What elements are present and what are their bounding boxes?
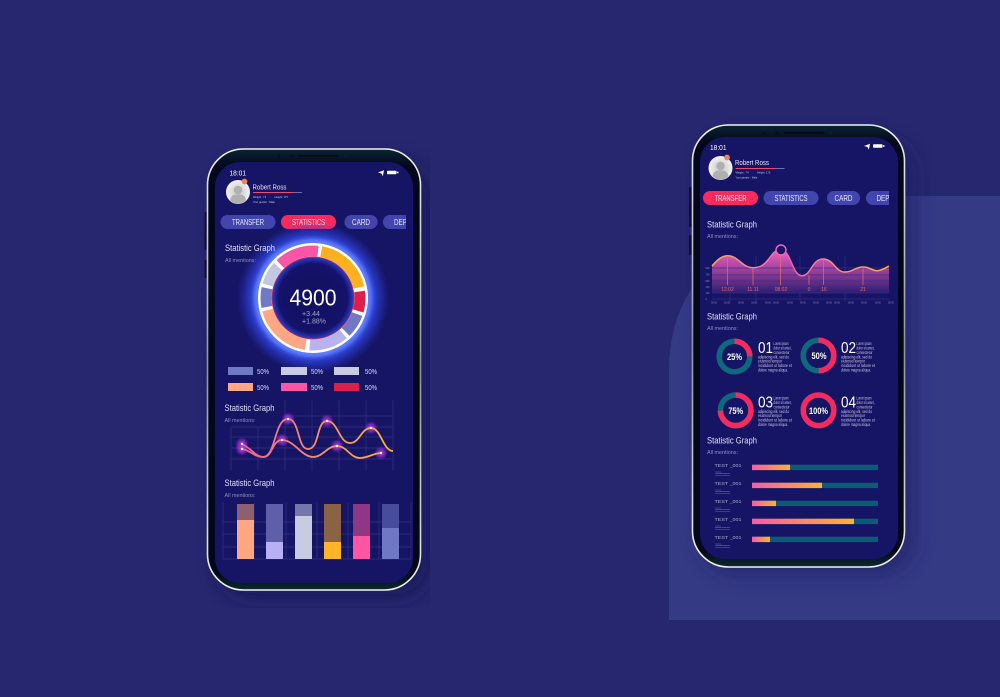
donut chart: 4900: +1.88% [302,316,326,326]
donut 75% with text 03: Lorem ipsum [774,396,789,400]
area chart right: 300 [706,286,710,289]
area chart right: 12.02 [721,287,734,293]
donut 50% with text 02: adipiscing elit, sed do [841,354,872,360]
donut 100% with text 04: 100% [809,406,828,417]
area chart right: 16 [821,287,827,293]
left phone drop shadow [217,160,432,600]
heading: statistic graph 3 right: Statistic Graph [707,436,757,446]
profile left: Your gender : Male [253,200,275,204]
progress bars right [714,463,878,548]
status bar left: 18:01 [230,168,246,178]
status bar right [710,143,884,152]
tabs right: TRANSFER [714,194,747,203]
area chart right: 00:00 [787,302,794,304]
donut 100% with text 04: adipiscing elit, sed do [841,409,872,414]
donut 50% with text 02: 50% [812,351,827,362]
donut 50% with text 02: 02 [841,340,856,357]
heading: statistic graph 3 left [224,478,274,499]
tabs right [703,191,906,205]
status bar left [230,168,398,178]
tabs right: STATISTICS [774,194,808,203]
area chart right: 00:00 [765,302,772,304]
status bar right: 18:01 [710,143,726,152]
heading: statistic graph 1 left: Statistic Graph [225,243,275,254]
heading: statistic graph 2 right: Statistic Graph [707,312,757,322]
donut 50% with text 02: incididunt ut labore et [841,363,876,368]
heading: statistic graph 2 left: All mentions: [224,418,256,424]
heading: statistic graph 1 left [225,243,275,264]
donut 25% with text 01: adipiscing elit, sed do [758,354,789,360]
area chart right: 21 [860,287,866,293]
donut 75% with text 03: dolor sit amet, [774,400,792,405]
donut 50% with text 02 [803,340,876,372]
heading: statistic graph 3 right: All mentions: [707,450,738,456]
area chart right: 00:00 [751,302,758,304]
legend: 50% [257,367,269,376]
area chart right: 08.02 [775,287,787,293]
heading: statistic graph 1 right: All mentions: [707,234,738,240]
area chart right: 00:00 [888,302,895,304]
donut 75% with text 03: 03 [758,394,773,412]
donut chart glow [237,222,389,374]
donut 75% with text 03: incididunt ut labore et [758,418,793,422]
area chart right [706,245,895,304]
donut 75% with text 03: consectetur [774,404,790,410]
area chart right: 00:00 [773,302,780,304]
legend: 50% [311,367,323,376]
heading: statistic graph 1 right: Statistic Graph [707,220,757,230]
donut 25% with text 01: Lorem ipsum [774,341,789,346]
progress bars right: TEST _001 [714,535,742,540]
donut 100% with text 04: eiusmod tempor [841,413,865,418]
heading: statistic graph 1 right [707,220,757,240]
donut 50% with text 02: dolore magna aliqua. [841,368,871,372]
area chart right: 900 [706,267,710,270]
donut 25% with text 01: 25% [727,352,742,363]
donut 100% with text 04: incididunt ut labore et [841,418,876,422]
donut chart: 4900 [247,232,379,364]
area chart right: 00:00 [826,302,833,304]
area chart right: 0 [808,287,811,293]
legend: 50% [257,383,269,392]
donut 75% with text 03: dolore magna aliqua. [758,422,788,427]
legend [228,367,377,392]
tabs left: DEP [394,218,407,227]
profile left: Weight : 74 [253,195,267,199]
heading: statistic graph 2 right [707,312,757,332]
donut 50% with text 02: dolor sit amet, [856,346,874,350]
area chart right: 100 [706,292,710,295]
donut 75% with text 03: eiusmod tempor [758,413,782,418]
donut 25% with text 01: dolor sit amet, [774,346,792,350]
donut 25% with text 01: 01 [758,340,773,357]
area chart right: 500 [706,280,710,283]
profile right [708,155,784,180]
line chart left [231,400,393,471]
donut 75% with text 03 [720,394,793,427]
background panel: lighter shape behind right phone [669,196,1000,620]
tabs left: CARD [352,218,370,227]
heading: statistic graph 3 left: Statistic Graph [224,478,274,489]
profile left [226,179,302,204]
donut 75% with text 03: adipiscing elit, sed do [758,409,789,414]
profile left: Robert Ross [252,182,287,192]
area chart right: 00:00 [861,302,868,304]
donut 50% with text 02: Lorem ipsum [856,341,872,346]
donut 100% with text 04: Lorem ipsum [856,396,872,400]
legend: 50% [365,383,377,392]
donut 25% with text 01 [719,340,793,372]
area chart right: 00:00 [813,302,820,304]
donut chart: 4900: +3.44 [302,309,320,318]
area chart right: 00:00 [800,302,807,304]
donut 100% with text 04: dolor sit amet, [856,400,874,405]
tabs right: DEP [876,194,890,203]
profile left: Height: 175 [274,195,288,199]
area chart right: 00:00 [724,302,731,304]
area chart right: 700 [706,274,710,276]
donut 100% with text 04 [803,394,876,427]
heading: statistic graph 1 left: All mentions: [225,258,256,264]
donut 100% with text 04: dolore magna aliqua. [841,422,871,427]
tabs left: TRANSFER [232,218,264,227]
bar chart left [223,503,411,559]
profile right: Your gender : Male [736,176,758,180]
tabs left [220,215,423,229]
area chart right: 11.11 [747,287,759,293]
profile right: Weight : 74 [736,170,749,174]
tabs right: CARD [834,194,853,203]
phone: right, transfer screen [689,125,906,567]
legend: 50% [365,367,377,376]
phone: left, statistics screen [204,149,423,590]
donut 25% with text 01: consectetur [774,350,790,355]
progress bars right: TEST _001 [714,499,742,504]
donut 25% with text 01: eiusmod tempor [758,359,782,364]
profile right: Height: 175 [757,170,771,174]
progress bars right: TEST _001 [714,517,742,522]
donut 100% with text 04: 04 [841,394,856,412]
area chart right: 00:00 [848,302,855,304]
heading: statistic graph 2 left [224,403,274,424]
progress bars right: TEST _001 [714,481,742,486]
legend: 50% [311,383,323,392]
heading: statistic graph 3 right [707,436,757,456]
heading: statistic graph 3 left: All mentions: [224,493,256,499]
heading: statistic graph 2 left: Statistic Graph [224,403,274,414]
tabs left: STATISTICS [292,218,325,227]
area chart right: 00:00 [738,302,745,304]
donut chart: 4900: 4900 [290,285,336,311]
area chart right: 00:00 [834,302,841,304]
right phone drop shadow [706,196,918,578]
profile right: Robert Ross [735,158,769,167]
phone frame right [689,125,904,567]
donut 100% with text 04: consectetur [856,404,873,410]
donut 25% with text 01: incididunt ut labore et [758,363,793,368]
area chart right: 00:00 [875,302,882,304]
area chart right: 0 [706,298,708,301]
area chart right: 00:00 [711,302,718,304]
heading: statistic graph 2 right: All mentions: [707,326,738,332]
donut 25% with text 01: dolore magna aliqua. [758,368,788,372]
donut 50% with text 02: consectetur [856,350,873,355]
donut 50% with text 02: eiusmod tempor [841,359,865,364]
donut 75% with text 03: 75% [728,406,744,417]
progress bars right: TEST _001 [714,463,742,468]
phone frame left [204,149,420,590]
